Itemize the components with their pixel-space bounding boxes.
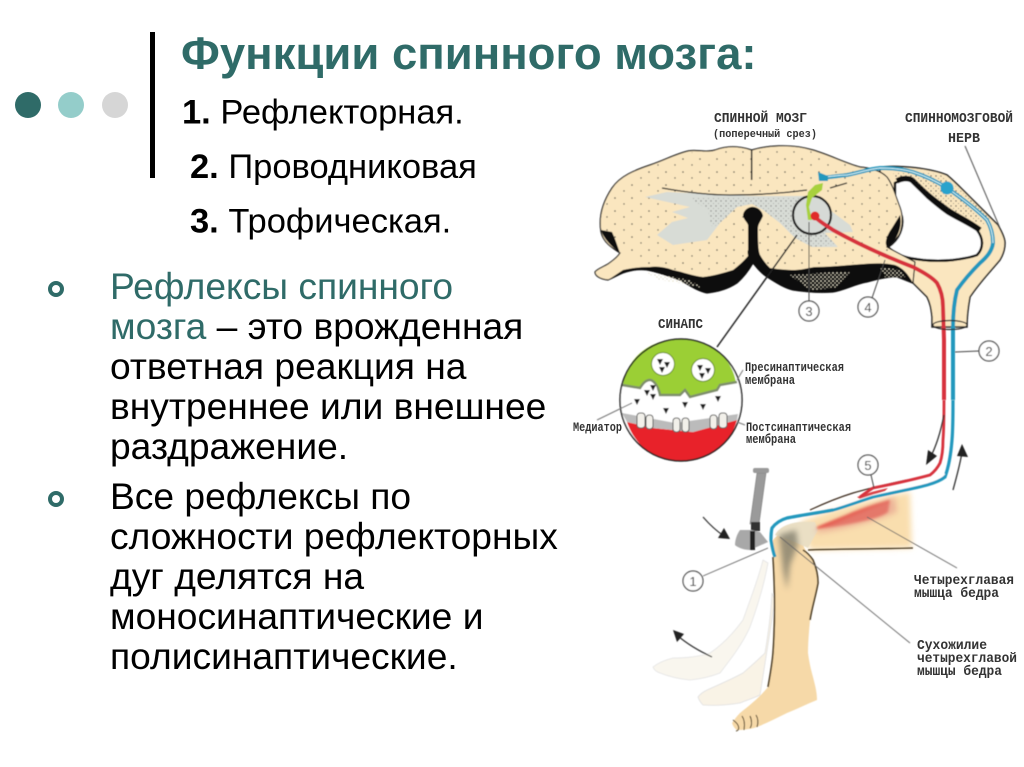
label: synapse: СИНАПС (658, 317, 704, 333)
arrow: leg kick (678, 636, 712, 657)
synaptic vesicles (652, 352, 674, 376)
bullet: reflex definition (50, 265, 546, 467)
label: quadriceps tendon (917, 638, 1017, 680)
synapse magnified circle (597, 339, 745, 461)
label: quadriceps tendon: Сухожилие (917, 638, 987, 654)
nerve inner opening (888, 180, 982, 261)
green synapse terminals (806, 183, 823, 220)
central grey line (662, 183, 847, 195)
bullet: reflex definition: Рефлексы спинного (110, 265, 453, 307)
blue sensory neuron (822, 168, 993, 400)
callout 2 (955, 341, 999, 361)
bullet: reflex classification: моносинаптические и (110, 595, 483, 637)
label: quadriceps tendon: четырехглавой (917, 651, 1017, 667)
label: postsynaptic membrane: Постсинаптическая (746, 421, 851, 435)
callout 5 (858, 455, 878, 488)
knee skin (775, 522, 818, 548)
leader to nerve (965, 146, 1000, 228)
thigh fade (800, 492, 912, 550)
thigh outline (808, 548, 913, 550)
dark band above opening (897, 179, 980, 230)
toes (733, 715, 758, 731)
knee shading (779, 530, 798, 590)
reflex hammer (735, 468, 769, 550)
label: spinal nerve (905, 109, 1013, 147)
label: postsynaptic membrane (746, 421, 851, 447)
ghost leg near (698, 593, 775, 705)
bullet: reflex definition: ответная реакция на (110, 345, 467, 387)
callout 3: 3 (805, 304, 813, 319)
label: quadriceps tendon: мышцы бедра (917, 664, 1003, 680)
callout 3 (799, 222, 819, 321)
magnified circle (793, 196, 831, 234)
dark outer contour (608, 207, 913, 293)
posterior median sulcus (751, 150, 753, 180)
left lateral dark wedge (601, 230, 620, 253)
numbered list of functions (182, 94, 477, 240)
sensory neuron in leg (771, 400, 953, 557)
bullet: reflex classification: дуг делятся на (110, 555, 364, 597)
label: presynaptic membrane: мембрана (745, 373, 795, 388)
dorsal ganglion shading (892, 172, 990, 226)
bullet: reflex definition: раздражение. (110, 425, 348, 467)
callout 5: 5 (864, 458, 872, 473)
label: spinal cord: (поперечный срез) (713, 129, 817, 141)
title: Функции спинного мозга: (181, 28, 757, 79)
grey matter (645, 192, 853, 247)
label: quadriceps: Четырехглавая (914, 573, 1014, 589)
label: spinal cord (713, 109, 817, 141)
leaders (703, 517, 957, 643)
label: mediator: Медиатор (573, 421, 622, 435)
label: postsynaptic membrane: мембрана (746, 432, 796, 447)
bullet: reflex classification (50, 475, 558, 677)
bullet: reflex classification: полисинаптические. (110, 635, 458, 677)
decorative dots (15, 92, 128, 118)
numbered list of functions: 1. Рефлекторная. (182, 94, 464, 132)
callout 1: 1 (689, 574, 697, 589)
label: quadriceps (914, 573, 1014, 602)
motor neuron in leg (860, 400, 944, 497)
vertical title rule (150, 32, 155, 178)
quadriceps (817, 500, 890, 529)
right lateral dark wedge (886, 215, 901, 247)
bullet: reflex definition: внутреннее или внешнее (110, 385, 546, 427)
receptors (637, 413, 727, 432)
callout 2: 2 (985, 344, 993, 359)
speckled patches in contour (645, 267, 905, 290)
nerve root ring (933, 320, 967, 330)
label: spinal nerve: НЕРВ (948, 131, 981, 147)
lower leg (732, 531, 818, 730)
label: presynaptic membrane: Пресинаптическая (745, 361, 844, 375)
bullet: reflex definition: мозга – это врожденная (110, 305, 523, 347)
numbered list of functions: 2. Проводниковая (190, 148, 477, 186)
bullet: reflex classification: сложности рефлекторных (110, 515, 558, 557)
cord body (595, 146, 915, 293)
diagram: spinal cord cross-section (595, 146, 1005, 400)
arrow: signal up (953, 452, 962, 490)
leg with knee reflex (653, 341, 999, 731)
numbered list of functions: 3. Трофическая. (190, 202, 451, 240)
label: spinal nerve: СПИННОМОЗГОВОЙ (905, 109, 1013, 127)
arrow: hammer strike (703, 517, 724, 536)
spinal nerve root body (880, 166, 1005, 327)
leader to synapse (717, 235, 797, 347)
red motor neuron (815, 217, 944, 400)
label: spinal cord: СПИННОЙ МОЗГ (714, 109, 807, 127)
label: presynaptic membrane (745, 361, 844, 388)
callout 1 (683, 571, 703, 591)
arrow: signal down (930, 415, 944, 458)
callout 4 (858, 260, 885, 317)
label: quadriceps: мышца бедра (914, 586, 1000, 602)
bullet: reflex classification: Все рефлексы по (110, 475, 411, 517)
ghost leg far (653, 560, 768, 680)
callout 4: 4 (864, 300, 872, 315)
cord stippling (602, 148, 899, 275)
